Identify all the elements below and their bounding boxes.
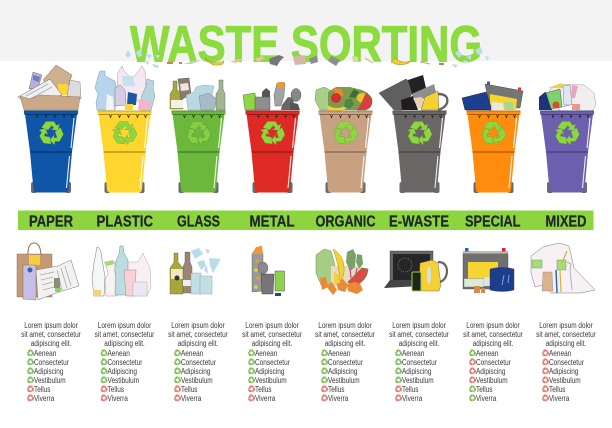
illustration: metal — [252, 246, 284, 296]
column text: organic — [315, 320, 375, 403]
description and list: Adipiscing — [328, 366, 357, 376]
category labels: GLASS — [177, 214, 220, 230]
category labels: E-WASTE — [389, 214, 449, 230]
illustration: organic — [316, 249, 368, 295]
description and list: Vestibulum — [402, 375, 434, 385]
description and list: Adipiscing — [549, 366, 578, 376]
description and list — [463, 320, 523, 403]
description and list — [21, 320, 81, 403]
recycle symbol — [110, 122, 139, 147]
recycle symbol — [331, 122, 360, 147]
description and list: Lorem ipsum dolor — [24, 320, 78, 330]
illustration: plastic — [92, 246, 151, 296]
recycle symbol — [37, 122, 66, 147]
description and list: Viverra — [328, 393, 349, 403]
title debris — [125, 47, 489, 68]
description and list: Lorem ipsum dolor — [318, 320, 372, 330]
description and list: Adipiscing — [476, 366, 505, 376]
illustration: glass — [170, 248, 221, 294]
description and list: sit amet, consectetur — [389, 329, 449, 339]
illustration: e-waste — [384, 251, 447, 291]
column text: plastic — [95, 320, 155, 403]
description and list: sit amet, consectetur — [95, 329, 155, 339]
description and list: Tellus — [255, 384, 272, 394]
description and list: Lorem ipsum dolor — [466, 320, 520, 330]
description and list — [168, 320, 228, 403]
description and list: Viverra — [402, 393, 423, 403]
description and list: Adipiscing — [107, 366, 137, 376]
description and list: Aenean — [402, 348, 424, 358]
metal trash — [243, 82, 301, 110]
description and list: Adipiscing — [34, 366, 63, 376]
description and list: Aenean — [328, 348, 350, 358]
description and list: Viverra — [107, 393, 129, 403]
description and list: Aenean — [476, 348, 498, 358]
description and list — [315, 320, 375, 403]
description and list: Viverra — [476, 393, 497, 403]
description and list: adipiscing elit. — [399, 338, 439, 348]
category band — [18, 210, 594, 230]
description and list: Consectetur — [181, 357, 216, 367]
description and list: Consectetur — [107, 357, 143, 367]
description and list: Tellus — [328, 384, 345, 394]
recycle symbol — [405, 122, 434, 147]
list icons — [100, 350, 108, 402]
description and list: Aenean — [255, 348, 277, 358]
description and list: Tellus — [181, 384, 198, 394]
description and list — [95, 320, 155, 403]
category labels: METAL — [250, 214, 295, 230]
description and list: Lorem ipsum dolor — [245, 320, 299, 330]
description and list: Lorem ipsum dolor — [171, 320, 225, 330]
description and list: sit amet, consectetur — [315, 329, 375, 339]
description and list: Aenean — [549, 348, 571, 358]
column text: paper — [21, 320, 81, 403]
column text: glass — [168, 320, 228, 403]
column text: metal — [242, 320, 302, 403]
bin: mixed — [539, 84, 596, 193]
description and list: Lorem ipsum dolor — [392, 320, 446, 330]
description and list: adipiscing elit. — [178, 338, 218, 348]
glass trash — [170, 78, 225, 110]
description and list: Viverra — [549, 393, 570, 403]
list icons — [541, 350, 550, 402]
description and list: adipiscing elit. — [473, 338, 513, 348]
list icons — [394, 350, 403, 402]
column text: e-waste — [389, 320, 449, 403]
description and list: sit amet, consectetur — [168, 329, 228, 339]
recycle symbol — [553, 122, 582, 147]
description and list: sit amet, consectetur — [536, 329, 596, 339]
description and list: Adipiscing — [255, 366, 284, 376]
description and list: Tellus — [549, 384, 566, 394]
description and list: sit amet, consectetur — [242, 329, 302, 339]
description and list: Lorem ipsum dolor — [98, 320, 152, 330]
recycle symbol — [184, 122, 213, 147]
title: WASTE SORTING — [130, 16, 482, 72]
description and list: Vestibulum — [328, 375, 360, 385]
description and list — [389, 320, 449, 403]
column text: special — [463, 320, 523, 403]
category labels: SPECIAL — [465, 214, 521, 230]
description and list: adipiscing elit. — [31, 338, 71, 348]
bin: paper — [18, 65, 81, 193]
description and list: sit amet, consectetur — [463, 329, 523, 339]
description and list: Tellus — [107, 384, 124, 394]
description and list: Tellus — [476, 384, 493, 394]
description and list: Tellus — [34, 384, 51, 394]
description and list: adipiscing elit. — [546, 338, 586, 348]
description and list: Lorem ipsum dolor — [539, 320, 593, 330]
description and list: adipiscing elit. — [325, 338, 365, 348]
category labels: PLASTIC — [96, 214, 153, 230]
bin: metal — [243, 82, 301, 193]
recycle symbol — [258, 122, 287, 147]
recycle symbol — [479, 122, 508, 147]
description and list: Consectetur — [328, 357, 363, 367]
description and list: adipiscing elit. — [104, 338, 145, 348]
list icons — [173, 350, 182, 402]
description and list: Aenean — [34, 348, 56, 358]
description and list: Viverra — [181, 393, 202, 403]
plastic trash — [95, 66, 155, 110]
bin: organic — [315, 87, 373, 193]
description and list: Consectetur — [549, 357, 584, 367]
description and list: Viverra — [34, 393, 55, 403]
description and list: Vestibulum — [549, 375, 581, 385]
list icons — [26, 350, 35, 402]
description and list: Vestibulum — [107, 375, 139, 385]
illustration: mixed — [531, 243, 595, 293]
description and list: Consectetur — [255, 357, 290, 367]
description and list: Viverra — [255, 393, 276, 403]
bin: special — [462, 82, 523, 193]
description and list: Vestibulum — [255, 375, 287, 385]
e-waste trash — [379, 75, 447, 110]
special trash — [462, 82, 523, 110]
bin: e-waste — [379, 75, 447, 193]
description and list: Consectetur — [34, 357, 69, 367]
description and list — [536, 320, 596, 403]
description and list: Adipiscing — [402, 366, 431, 376]
list icons — [468, 350, 477, 402]
list icons — [247, 350, 256, 402]
description and list: Aenean — [107, 348, 130, 358]
header band — [0, 0, 612, 61]
description and list: Adipiscing — [181, 366, 210, 376]
description and list: Tellus — [402, 384, 419, 394]
category labels: ORGANIC — [316, 214, 376, 230]
description and list: sit amet, consectetur — [21, 329, 81, 339]
bin: glass — [170, 78, 226, 193]
illustration: paper — [17, 243, 79, 300]
category labels: PAPER — [29, 214, 73, 230]
mixed trash — [539, 84, 596, 119]
bin: plastic — [95, 66, 155, 193]
category labels — [29, 214, 586, 230]
list icons — [320, 350, 329, 402]
description and list: adipiscing elit. — [252, 338, 292, 348]
description and list: Consectetur — [402, 357, 437, 367]
description and list — [242, 320, 302, 403]
description and list: Vestibulum — [34, 375, 66, 385]
description and list: Consectetur — [476, 357, 511, 367]
category labels: MIXED — [546, 214, 586, 230]
column text: mixed — [536, 320, 596, 403]
description and list: Aenean — [181, 348, 203, 358]
description and list: Vestibulum — [476, 375, 508, 385]
illustration: special — [463, 248, 514, 293]
paper trash — [18, 65, 81, 110]
organic trash — [315, 87, 372, 111]
description and list: Vestibulum — [181, 375, 213, 385]
